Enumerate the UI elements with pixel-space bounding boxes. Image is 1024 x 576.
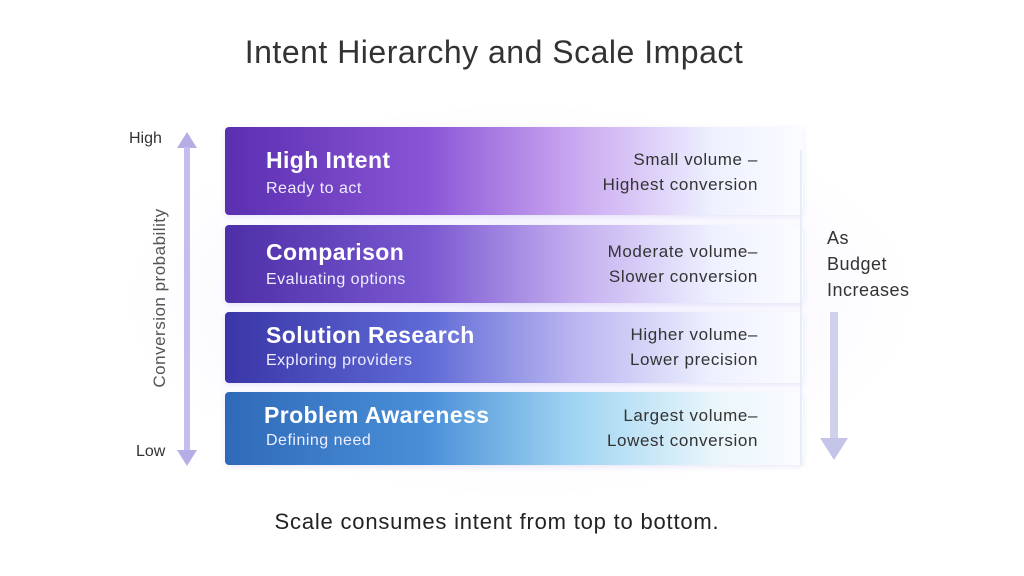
axis label: Conversion probability [150, 208, 169, 388]
label: As Budget Increases: As [827, 228, 849, 248]
arrow: budget down [820, 312, 848, 460]
band: Comparison: Moderate volume– [608, 242, 758, 261]
background glow [120, 100, 920, 500]
band: Problem Awareness [225, 392, 803, 465]
band: Solution Research: Exploring providers [266, 352, 412, 369]
right divider line [800, 150, 802, 465]
band: High Intent: High Intent [266, 147, 390, 173]
band: High Intent: Highest conversion [603, 175, 758, 194]
band: High Intent: Small volume – [633, 150, 758, 169]
label: As Budget Increases: Budget [827, 254, 887, 274]
band: Solution Research: Solution Research [266, 322, 475, 348]
arrow: vertical double [177, 132, 197, 466]
footer text: Scale consumes intent from top to bottom. [275, 509, 719, 534]
band: Solution Research: Lower precision [630, 350, 758, 369]
band: High Intent: Ready to act [266, 180, 362, 197]
label: As Budget Increases [827, 228, 910, 300]
left axis [129, 130, 197, 466]
band: Solution Research: Higher volume– [631, 325, 758, 344]
band: Problem Awareness: Lowest conversion [607, 431, 758, 450]
band: Solution Research [225, 312, 803, 383]
band: Problem Awareness: Defining need [266, 432, 371, 449]
band: High Intent [225, 127, 803, 215]
band: Comparison: Slower conversion [609, 267, 758, 286]
label: As Budget Increases: Increases [827, 280, 910, 300]
band: Comparison: Evaluating options [266, 271, 406, 288]
label: Low: Low [136, 443, 165, 460]
band: Comparison: Comparison [266, 239, 404, 265]
band: Comparison [225, 225, 803, 303]
label: High: High [129, 130, 162, 147]
band: Problem Awareness: Problem Awareness [264, 402, 489, 428]
band: Problem Awareness: Largest volume– [623, 406, 758, 425]
title: Intent Hierarchy and Scale Impact [245, 34, 743, 70]
